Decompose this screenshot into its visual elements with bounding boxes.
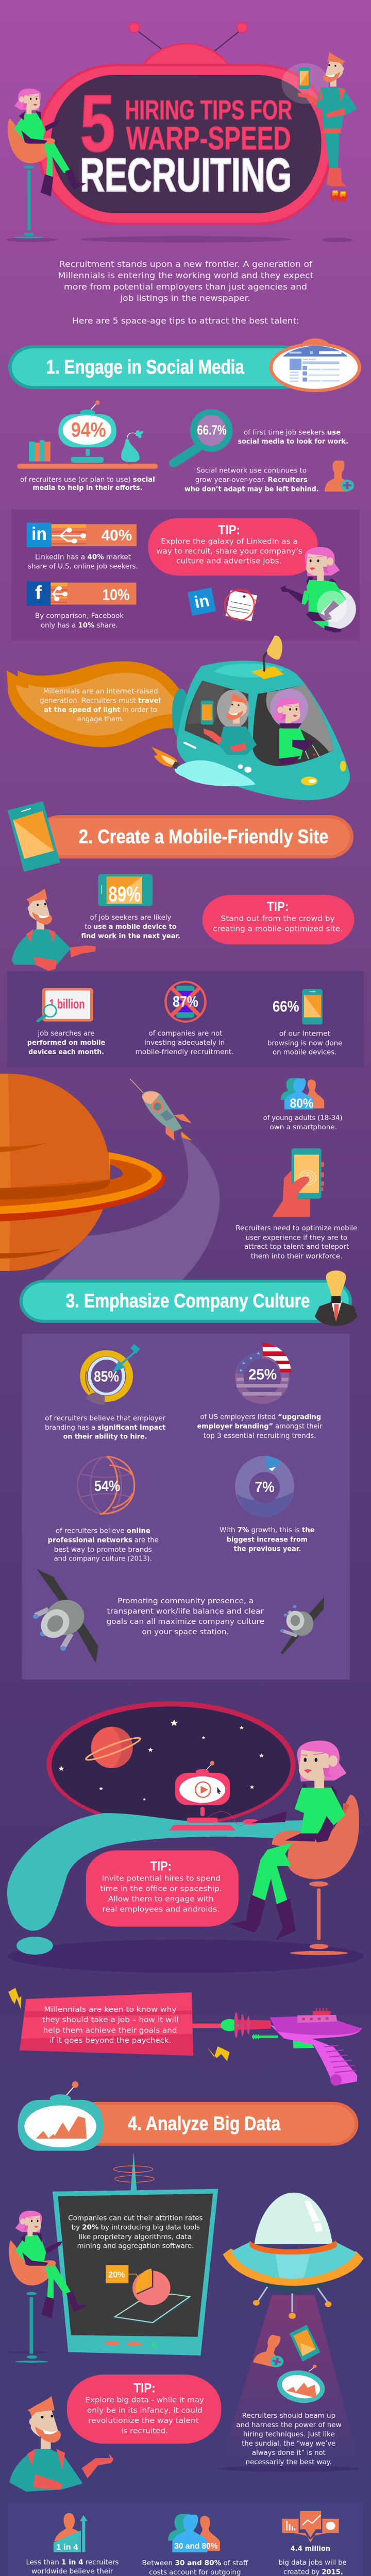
text: young adults: own a smartphone. (269, 1124, 337, 1131)
chart: 20% pie on phone: 20% (108, 2270, 125, 2279)
text: 7% growth: the previous year. (234, 1546, 301, 1553)
text: social network use: Social network use continues to (196, 467, 307, 474)
stat: 4.4 million: 4.4 million (291, 2545, 330, 2553)
text: job searches: performed on mobile (27, 1039, 105, 1047)
stat 89% phone: 89% (108, 882, 141, 906)
Facebook 10% bar (27, 581, 136, 606)
stat 94% on shelf: 94% (71, 418, 106, 442)
stat: 66% phone: 66% (273, 998, 299, 1015)
stat: 54% globe (78, 1456, 134, 1514)
ray gun beam banner: help them achieve their goals and (43, 2026, 177, 2035)
text: first time job seekers: social media to look for work. (238, 438, 348, 446)
text: companies not investing: investing adequately in (144, 1039, 225, 1047)
text: job seekers mobile (81, 914, 180, 940)
Facebook 10% bar: 10% (102, 586, 130, 603)
text: companies not investing: of companies are not (148, 1030, 223, 1038)
text: job searches: job searches are (38, 1030, 95, 1038)
text: optimize mobile UX: attract top talent and teleport (244, 1243, 349, 1251)
stat: 4.4 million (282, 2511, 339, 2553)
text: community presence (107, 1597, 264, 1636)
panel: company culture stats (22, 1334, 350, 1680)
stat: 1 billion (38, 988, 93, 1022)
stat: 25% flag donut: 25% (248, 1366, 277, 1383)
text: big data jobs: created by 2015. (283, 2568, 343, 2576)
text: employer branding: branding has a significant impact (45, 1424, 166, 1432)
tip bubble 3: real employees and androids. (102, 1905, 220, 1913)
text: employer branding (45, 1415, 166, 1440)
text: US employers (197, 1413, 323, 1439)
rocket trail (43, 1133, 220, 1280)
heading 4: 4. Analyze Big Data (128, 2112, 281, 2134)
ray gun beam banner (20, 1992, 223, 2056)
title TV (38, 22, 331, 224)
text: beam up (236, 2412, 342, 2466)
text: 1 in 4 recruiters: worldwide believe their (31, 2568, 113, 2575)
icon: video monitor (169, 1761, 259, 1831)
icon: magnifier 66.7% (174, 409, 232, 463)
text: attrition rates: mining and aggregation software. (77, 2243, 194, 2250)
text: 1 in 4 recruiters: Less than 1 in 4 recruiters (26, 2558, 119, 2566)
text: US employers: top 3 essential recruiting trends. (204, 1432, 316, 1439)
icon: LinkedIn tilted (188, 587, 216, 616)
icon: social media tablet: Jane Smith (302, 358, 316, 361)
tip bubble 1: TIP: (218, 523, 240, 537)
text: LinkedIn share (28, 553, 138, 570)
flame banner: at the speed of light in order to (44, 706, 157, 714)
stat: 66% phone (273, 989, 323, 1025)
title: 5 (80, 78, 115, 169)
icon: lightbulb head man (315, 1270, 357, 1326)
text: Facebook share: only has a 10% share. (41, 622, 118, 630)
tip bubble 3 (86, 1850, 239, 1927)
tip bubble 4: Explore big data - while it may (85, 2396, 204, 2404)
stat: 54% globe: 54% (94, 1478, 120, 1494)
title (80, 78, 292, 201)
icon: satellite left (33, 1569, 98, 1664)
text: online networks: of recruiters believe online (56, 1527, 150, 1535)
icon: satellite right (280, 1597, 324, 1654)
stool big (309, 1882, 328, 1940)
text: 94% of recruiters (20, 476, 155, 492)
text: beam up: the sundial, the “way we’ve (242, 2440, 335, 2448)
text: attrition rates: by 20% by introducing big data tools (72, 2224, 200, 2231)
text: staff costs (142, 2560, 248, 2576)
text: internet browsing: on mobile devices. (273, 1049, 336, 1056)
text: social network use: who don’t adapt may be left behind. (184, 485, 319, 493)
stat 89% phone (98, 874, 153, 906)
tip bubble 3: Allow them to engage with (108, 1894, 214, 1903)
stat: 30 and 80% (168, 2514, 220, 2552)
stat: 80% young adults (281, 1078, 324, 1110)
ray gun beam banner: they should take a job – how it will (42, 2015, 178, 2024)
Facebook 10% bar: f (35, 582, 42, 603)
text: US employers: of US employers listed “upgrading (200, 1413, 321, 1421)
man half figure with gloves (9, 2396, 113, 2492)
UFO (223, 2193, 363, 2319)
stat: 85% target donut (83, 1344, 140, 1405)
text: companies not investing: mobile-friendly recruitment. (136, 1048, 234, 1056)
stat: 25% flag donut (237, 1343, 293, 1400)
text: online networks: and company culture (2013). (54, 1555, 152, 1563)
text: community presence: Promoting community presence, a (117, 1597, 254, 1605)
tip bubble 1: Explore the galaxy of LinkedIn as a (161, 537, 298, 546)
tip bubble 2: TIP: (267, 900, 289, 913)
spaceship with characters (151, 636, 350, 800)
text: big data jobs: big data jobs will be (278, 2559, 347, 2567)
tip bubble 4: revolutionize the way talent (88, 2416, 199, 2425)
stat: 1 in 4 (54, 2513, 88, 2552)
stat: 30 and 80%: 30 and 80% (174, 2541, 217, 2551)
tip bubble 3: Invite potential hires to spend (102, 1874, 221, 1883)
intro text: Recruitment stands upon a new frontier. A generation of (59, 260, 313, 269)
ray gun beam banner: Millennials are keen to know why (44, 2005, 177, 2014)
text: Facebook share (35, 613, 124, 630)
ray gun (221, 2008, 362, 2086)
LinkedIn 40% bar: 40% (102, 527, 132, 544)
icon: job listing circled (225, 588, 259, 621)
text: optimize mobile UX: them into their workforce. (251, 1252, 342, 1260)
text: community presence: on your space station. (142, 1628, 229, 1636)
standing man with phone (298, 52, 357, 204)
text: big data jobs (278, 2559, 347, 2576)
panel: big data stats (8, 2502, 362, 2576)
shadows under title TV (6, 236, 352, 243)
text: beam up: always done it” is not (252, 2449, 326, 2457)
icon: magnifier 66.7%: 66.7% (197, 422, 227, 437)
text: US employers: employer branding” amongst their (197, 1423, 323, 1430)
text: job seekers mobile: find work in the next year. (81, 933, 180, 940)
heading 2 (36, 815, 353, 858)
heading 4 (71, 2102, 358, 2146)
text: young adults (263, 1114, 342, 1131)
intro text: job listings in the newspaper. (120, 294, 250, 303)
text: LinkedIn share: share of U.S. online job seekers. (28, 563, 138, 570)
flame banner: generation. Recruiters must travel (40, 697, 161, 705)
icon: LinkedIn tilted: in (193, 591, 211, 612)
desk base and stool base (16, 1937, 348, 1955)
seated woman at desk (229, 1741, 359, 1940)
text: 1 in 4 recruiters (23, 2558, 124, 2576)
text: first time job seekers: of first time job seekers use (244, 429, 341, 436)
abducted icons (253, 2326, 329, 2408)
icon: data monitor (18, 2081, 104, 2151)
text: online networks (48, 1527, 159, 1563)
stat: 85% target donut: 85% (94, 1368, 119, 1385)
text: employer branding: on their ability to hire. (63, 1433, 147, 1440)
text: 7% growth: biggest increase from (227, 1536, 308, 1544)
LinkedIn 40% bar: in (31, 524, 47, 545)
stat 94% on shelf (17, 400, 158, 469)
stat: 80% young adults: 80% (290, 1096, 313, 1110)
text: beam up: Recruiters should beam up (242, 2412, 335, 2420)
intro closing line: Here are 5 space-age tips to attract the best talent: (72, 316, 299, 326)
big tablet with antenna (53, 2153, 218, 2355)
intro text: more from potential employers than just agencies and (64, 282, 307, 292)
text: LinkedIn share: LinkedIn has a 40% market (35, 553, 131, 561)
text: young adults: of young adults (18-34) (263, 1114, 342, 1122)
flame banner: engage them. (77, 716, 124, 723)
text: attrition rates (68, 2214, 203, 2250)
icon: tilted phone (9, 803, 59, 871)
icon: phone in hand (272, 1148, 324, 1217)
tip bubble 1: culture and advertise jobs. (176, 557, 281, 565)
tip bubble 3: TIP: (150, 1859, 172, 1873)
stool small (8, 2292, 48, 2363)
text: internet browsing: browsing is now done (267, 1040, 342, 1047)
text: companies not investing (136, 1030, 234, 1056)
seated woman beside tablet (9, 2211, 88, 2319)
text: job searches (27, 1030, 105, 1056)
text: attrition rates: like proprietary algorithms, data (79, 2233, 192, 2241)
woman on sphere (281, 547, 356, 633)
man half figure (12, 888, 96, 971)
flame banner: Millennials are an internet-raised (43, 688, 158, 696)
text: 7% growth (220, 1527, 315, 1553)
text: job seekers mobile: to use a mobile device to (85, 923, 177, 931)
flame banner (7, 662, 182, 747)
tip bubble 3: time in the office or spaceship. (100, 1885, 222, 1893)
text: community presence: transparent work/life balance and clear (107, 1607, 264, 1616)
text: Facebook share: By comparison, Facebook (35, 613, 124, 620)
UFO beam (218, 2295, 360, 2472)
icon: social media tablet (269, 338, 361, 392)
text: job seekers mobile: of job seekers are likely (90, 914, 171, 922)
text: online networks: best way to promote brands (54, 1546, 152, 1554)
text: beam up: hiring techniques. Just like (243, 2431, 335, 2438)
space window (46, 1701, 296, 1827)
tip bubble 2: creating a mobile-optimized site. (213, 924, 343, 933)
text: first time job seekers (238, 429, 348, 446)
intro text (58, 260, 314, 303)
panel: mobile stats (7, 972, 364, 1067)
text: beam up: necessarily the best way. (246, 2459, 332, 2466)
stat: 87% crossed phone (165, 981, 206, 1022)
text: 94% of recruiters: of recruiters use (or plan to use) social (20, 476, 155, 484)
text: internet browsing (267, 1030, 342, 1056)
stat: 1 in 4: 1 in 4 (56, 2542, 78, 2552)
text: job searches: devices each month. (28, 1048, 104, 1056)
heading 3 (20, 1280, 352, 1323)
text: community presence: goals can all maximize company culture (107, 1617, 264, 1626)
LinkedIn 40% bar (27, 523, 137, 547)
intro text: Millennials is entering the working world and they expect (58, 271, 314, 281)
ringed planet (0, 1074, 165, 1271)
heading 1: 1. Engage in Social Media (46, 355, 245, 378)
stat: 7% earth donut (235, 1455, 294, 1517)
panel: LinkedIn (11, 510, 360, 640)
heading 1 (8, 345, 308, 389)
icon: add person (325, 461, 354, 492)
tip bubble 4: is recruited. (121, 2427, 168, 2435)
tip bubble 4: TIP: (133, 2381, 156, 2395)
text: optimize mobile UX (235, 1225, 357, 1260)
ray gun beam banner: if it goes beyond the paycheck. (49, 2036, 171, 2045)
stat: 1 billion: 1 billion (49, 996, 85, 1011)
text: 94% of recruiters: media to help in their efforts. (32, 484, 142, 492)
text: optimize mobile UX: Recruiters need to optimize mobile (235, 1225, 357, 1232)
seated woman on stool (8, 89, 87, 239)
tip bubble 1: way to recruit, share your company’s (156, 547, 302, 555)
text: attrition rates: Companies can cut their attrition rates (68, 2214, 203, 2222)
text: staff costs: Between 30 and 80% of staff (142, 2560, 248, 2567)
chart: 20% pie on phone (106, 2265, 190, 2325)
tip bubble 4 (67, 2375, 221, 2444)
text: beam up: and harness the power of new (236, 2421, 342, 2429)
text: social network use: grow year-over-year. Recruiters (195, 476, 308, 484)
curved desk (7, 1813, 303, 1931)
floor shadow (8, 1940, 364, 1973)
stat: 7% earth donut: 7% (255, 1479, 275, 1495)
text: optimize mobile UX: user experience if they are to (246, 1234, 347, 1242)
rocket (130, 1079, 192, 1141)
text: employer branding: of recruiters believe that employer (45, 1415, 166, 1422)
tip bubble 2: Stand out from the crowd by (221, 914, 335, 923)
tip bubble 2 (203, 895, 354, 944)
text: 7% growth: With 7% growth, this is the (220, 1527, 315, 1534)
icon: lightning bolts (8, 1988, 229, 2061)
tip bubble 1 (148, 518, 318, 575)
text: internet browsing: of our Internet (279, 1030, 330, 1038)
text: social network use (184, 467, 319, 493)
text: online networks: professional networks are the (48, 1537, 159, 1544)
stat: 87% crossed phone: 87% (173, 993, 198, 1010)
tip bubble 4: only be in its infancy, it could (87, 2406, 203, 2415)
